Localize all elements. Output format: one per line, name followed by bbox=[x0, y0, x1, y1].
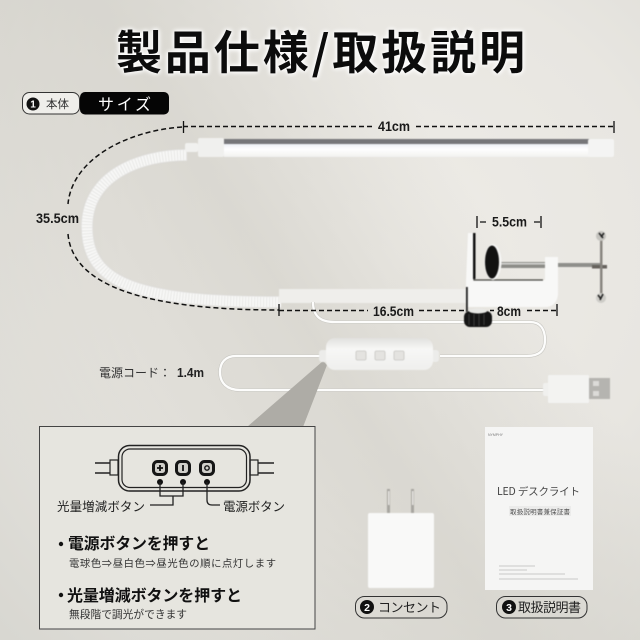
label: brightness buttons: 光量増減ボタン bbox=[57, 496, 145, 515]
button: minus bbox=[176, 462, 190, 474]
button: power bbox=[200, 462, 214, 474]
leader lines bbox=[150, 479, 220, 505]
instruction manual: LED デスクライト bbox=[497, 484, 580, 499]
power cord bbox=[220, 302, 545, 390]
dimension: 16.5cm and 8cm: 16.5cm bbox=[373, 304, 414, 319]
tag: outlet adapter: 2 bbox=[364, 602, 370, 614]
dimension: 5.5cm: 5.5cm bbox=[492, 214, 527, 230]
USB plug bbox=[543, 375, 610, 403]
gooseneck arm bbox=[87, 155, 281, 302]
bullet: power button heading: 電源ボタンを押すと bbox=[68, 531, 210, 554]
title: 製品仕様/取扱説明 bbox=[116, 17, 525, 83]
button: plus bbox=[154, 462, 166, 474]
dimension: 16.5cm and 8cm bbox=[279, 304, 557, 319]
text: power button description: 電球色⇒昼白色⇒昼光色の順に点灯します bbox=[69, 555, 276, 570]
controller diagram bbox=[95, 446, 274, 491]
AC adapter bbox=[368, 489, 434, 588]
dimension: 41cm: 41cm bbox=[378, 119, 410, 134]
section tag: main body size: サイズ bbox=[98, 91, 151, 115]
dimension: 5.5cm bbox=[477, 214, 541, 230]
dimension: 35.5cm bbox=[36, 127, 279, 310]
section tag: main body size: 本体 bbox=[46, 96, 69, 112]
section tag: main body size bbox=[22, 91, 169, 115]
label: power button: 電源ボタン bbox=[223, 496, 285, 515]
clamp knob bbox=[464, 308, 492, 327]
cord length label bbox=[99, 364, 204, 381]
cord length label: 1.4m bbox=[177, 365, 204, 380]
tag: instruction manual bbox=[496, 596, 587, 618]
lamp head bbox=[185, 138, 614, 157]
dimension: 16.5cm and 8cm: 8cm bbox=[497, 304, 521, 319]
text: brightness button description: 無段階で調光ができます bbox=[69, 607, 187, 622]
instruction manual bbox=[485, 427, 593, 590]
cord length label: 電源コード： bbox=[99, 364, 171, 381]
tag: instruction manual: 3 bbox=[506, 602, 512, 614]
instruction manual: NYMPHY bbox=[488, 433, 504, 437]
instruction manual: 取扱説明書兼保証書 bbox=[510, 506, 570, 516]
bullet: brightness button heading: 光量増減ボタンを押すと bbox=[67, 582, 242, 606]
tag: instruction manual: 取扱説明書 bbox=[518, 597, 581, 616]
dimension: 41cm bbox=[183, 119, 614, 134]
inline controller bbox=[319, 338, 439, 370]
tag: outlet adapter: コンセント bbox=[378, 597, 441, 616]
clamp bbox=[279, 231, 607, 312]
panel: button instructions bbox=[40, 426, 315, 629]
callout beam bbox=[247, 361, 327, 427]
tag: outlet adapter bbox=[356, 596, 447, 618]
section tag: main body size: 1 bbox=[30, 100, 36, 110]
dimension: 35.5cm: 35.5cm bbox=[36, 211, 79, 226]
